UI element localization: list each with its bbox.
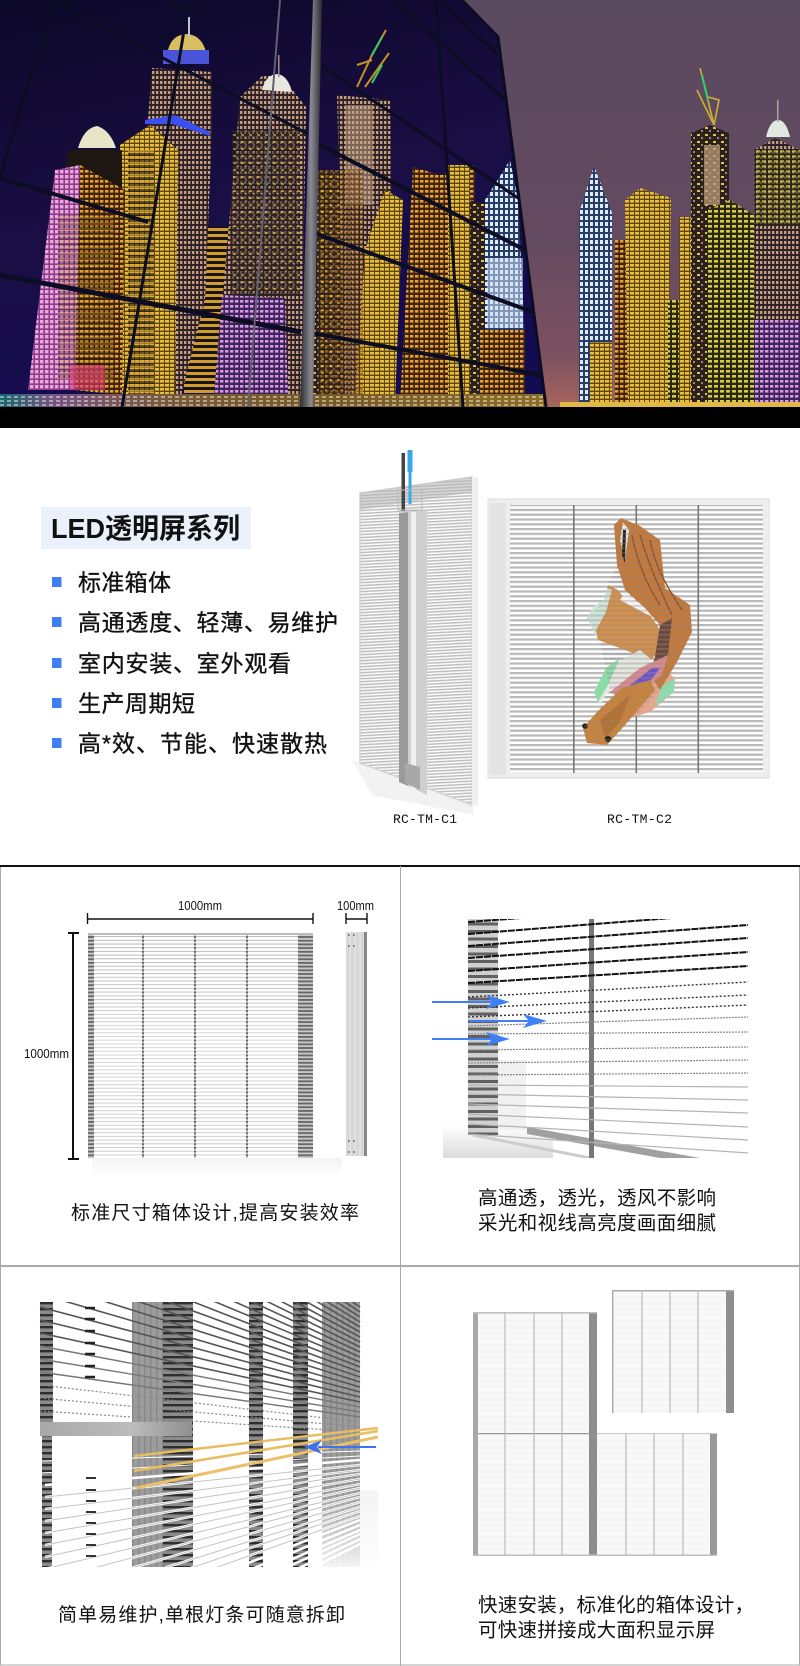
series title block: LED透明屏系列 — [51, 513, 240, 544]
series title block — [41, 507, 251, 549]
dimension: height 1000mm — [24, 933, 79, 1159]
feature 4: 生产周期短 — [78, 690, 195, 716]
feature 2: 高通透度、轻薄、易维护 — [78, 610, 338, 636]
towers on right side — [579, 68, 800, 407]
bottom right cabinet — [597, 1433, 717, 1556]
model label C2: RC-TM-C2 — [607, 812, 672, 827]
large cabinet column — [473, 1312, 597, 1556]
removed LED strips — [134, 1428, 378, 1488]
dimension: height 1000mm: 1000mm — [24, 1046, 69, 1061]
caption: 快速安装，标准化的箱体设计， — [478, 1594, 754, 1616]
panel: high transparency: 采光和视线高亮度画面细腻 — [478, 1212, 716, 1234]
cabinet side view — [346, 932, 367, 1156]
panel: high transparency — [432, 901, 748, 1234]
arrow 1 — [432, 995, 510, 1009]
feature bullet list — [52, 570, 338, 756]
panel: quick installation: 可快速拼接成大面积显示屏 — [478, 1620, 715, 1642]
arrow 2 — [469, 1014, 547, 1028]
stacked cabinets illustration — [473, 1290, 734, 1556]
cabinet front view — [88, 933, 342, 1176]
dimension: depth 100mm — [337, 898, 374, 924]
reflected towers — [0, 17, 546, 407]
arrow — [304, 1440, 376, 1454]
caption: 标准尺寸箱体设计,提高安装效率 — [71, 1202, 359, 1224]
product image: RC-TM-C2 front cabinet with fish — [488, 499, 769, 778]
screen close-up with removable strips — [40, 1302, 378, 1567]
dimension: depth 100mm: 100mm — [337, 898, 374, 913]
icon: betta fish — [582, 518, 692, 745]
arrow 3 — [432, 1032, 510, 1046]
panel: standard size cabinet — [24, 898, 374, 1224]
panel: quick installation — [473, 1290, 754, 1642]
feature 3: 室内安装、室外观看 — [78, 650, 291, 676]
caption: 高通透，透光，透风不影响 — [478, 1188, 716, 1210]
feature 5: 高*效、节能、快速散热 — [78, 730, 327, 756]
dimension: width 1000mm — [88, 898, 313, 924]
panel: easy maintenance — [40, 1302, 378, 1624]
glass frame lines — [0, 0, 546, 407]
feature 1: 标准箱体 — [78, 570, 171, 596]
caption: 简单易维护,单根灯条可随意拆卸 — [58, 1604, 345, 1626]
model label C1: RC-TM-C1 — [393, 812, 457, 827]
transparent screen close-up — [443, 901, 748, 1159]
feature grid frame — [0, 865, 800, 1666]
hero photo: city skyline reflected in glass facade — [0, 0, 800, 428]
top right cabinet — [612, 1290, 734, 1413]
dimension: width 1000mm: 1000mm — [178, 898, 222, 913]
product image: RC-TM-C1 angled cabinet — [352, 450, 478, 815]
